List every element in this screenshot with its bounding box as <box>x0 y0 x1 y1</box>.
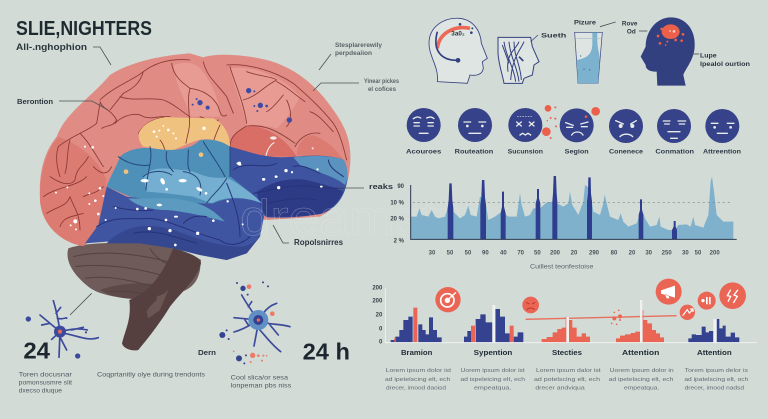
yellow dots <box>199 152 203 157</box>
y-axis labels: 0 <box>379 326 383 332</box>
y-axis labels: 2 % <box>394 238 405 244</box>
chart: stecties <box>542 317 590 342</box>
x-axis labels: 20 <box>571 250 578 256</box>
callout: berontion <box>17 99 108 110</box>
icon: neuron left <box>26 301 98 359</box>
column: sypention: Sypention <box>474 348 513 357</box>
y-axis labels: 10 % <box>390 200 405 206</box>
x-axis labels: 30 <box>429 250 436 256</box>
column: attention two: Attention <box>697 348 732 357</box>
y-axis labels <box>390 184 405 244</box>
y-axis labels: 200 <box>372 299 383 305</box>
right lobe dark blue <box>230 147 348 218</box>
x-axis labels: 30 <box>645 250 653 256</box>
icon: sad face badge <box>522 297 539 313</box>
column: stecties: ad potelscing elt, ech <box>534 377 600 383</box>
x-axis labels: 70 <box>517 250 525 256</box>
text block: right: lonpeman pbs niss <box>231 382 291 389</box>
y-axis labels: 20 <box>376 312 383 318</box>
y-axis labels: 200 <box>372 286 383 292</box>
chart: attention two <box>688 319 739 342</box>
column: attention two: drecer, imood nadsd <box>685 386 744 392</box>
icon: beaker <box>575 32 602 83</box>
x-axis labels: 80 <box>611 250 618 256</box>
column: attention one: ad ipetelscing elt, ech <box>609 377 673 383</box>
column: bramion: drecer, imood daoisd <box>386 386 446 392</box>
text block: left: dxecso diuque <box>19 388 63 395</box>
icon label: rove od: Rove <box>622 21 638 28</box>
right lobe small dots <box>238 162 323 188</box>
column: bramion <box>385 348 452 392</box>
face: conmation <box>655 109 694 155</box>
baseline and axis <box>385 288 757 343</box>
face: sucunsion <box>508 108 543 155</box>
column: attention two <box>684 348 748 392</box>
face: sucunsion: Sucunsion <box>508 148 543 155</box>
temporal lobe bands <box>55 140 322 260</box>
x-axis labels: 250 <box>662 250 672 256</box>
icon: arrow badge <box>680 305 695 320</box>
column: sypention: ad ispeleicing elt, ech <box>460 377 525 383</box>
icon row: heads and faces <box>406 17 750 155</box>
face: routeation: Routeation <box>455 148 493 155</box>
callout: perpdeaiion: Stesplarerewily <box>335 42 383 49</box>
face: conenece: Conenece <box>609 148 643 155</box>
column: stecties: Stecties <box>552 348 582 357</box>
x-axis labels: 30 <box>682 250 689 256</box>
chart: sypention <box>464 305 523 342</box>
icon label: sueth: Sueth <box>541 33 566 40</box>
x-axis labels: 40 <box>500 250 507 256</box>
text block: left: pomonsusmre slit <box>19 380 72 387</box>
stat: 24: 24 <box>23 338 50 364</box>
stat: 24 h: 24 h <box>303 338 350 364</box>
bar charts: five categories <box>372 279 757 392</box>
column: bramion: ad ipetelscing elt, ech <box>385 377 450 383</box>
column: attention two: ad ipatelscing elt, och <box>684 377 748 383</box>
face: conmation: Conmation <box>655 148 694 155</box>
icon: head with fibres <box>498 35 539 83</box>
watermark: dreamstime <box>240 190 525 246</box>
icon label: rove od <box>622 21 647 35</box>
column: stecties <box>534 348 601 392</box>
icon label: lupe: Lupe <box>700 52 717 59</box>
icon: head with arc <box>429 18 487 83</box>
column: stecties: drecer andviqua <box>535 386 586 392</box>
face: conenece <box>609 109 643 155</box>
threshold line <box>413 201 732 203</box>
left lobe white dots <box>84 146 86 148</box>
callout: yinear pickes <box>313 78 399 93</box>
face: acoruroes: Acouroes <box>406 148 442 155</box>
column: bramion: Lorem ipsum dolor ist <box>386 368 452 374</box>
neurons and bottom-left stats <box>19 281 350 395</box>
y-axis labels: 0 <box>379 339 383 345</box>
callout: ropolsnirres <box>273 225 344 247</box>
subtitle: All-.nghophion <box>16 42 87 53</box>
icon: megaphone <box>656 279 682 305</box>
callout: perpdeaiion: perpdeaiion <box>335 50 372 57</box>
x-axis labels <box>429 250 720 256</box>
flecks in pink <box>265 143 274 160</box>
callout: reaks <box>338 184 393 191</box>
dark spikes <box>448 176 677 239</box>
chart: attention one <box>616 300 664 342</box>
callout: berontion: Berontion <box>17 99 53 106</box>
icon: solid head <box>641 17 699 86</box>
dark base <box>85 183 264 260</box>
gyri lines: left lobe <box>43 103 112 230</box>
callout: reaks: reaks <box>369 184 393 191</box>
trend line <box>526 316 677 319</box>
callout: perpdeaiion <box>319 42 383 70</box>
x-axis labels: 90 <box>482 250 489 256</box>
face: segion <box>542 105 600 155</box>
column: attention one: Uorem ipsum dolor in <box>610 368 674 374</box>
column: attention one <box>609 348 674 392</box>
blue dots on cortex <box>192 88 292 123</box>
face: acoruroes <box>406 108 442 155</box>
chart: bramion <box>391 308 442 342</box>
column: sypention: empeatqua. <box>474 386 512 392</box>
x-axis labels: 200 <box>710 250 720 256</box>
icon: target <box>435 287 461 312</box>
column: sypention <box>460 348 525 392</box>
text block: right: Cool slica/or sesa <box>231 374 289 381</box>
text block: right <box>231 374 291 389</box>
text block: left: Toren docusnar <box>19 372 72 379</box>
white dots <box>141 179 149 182</box>
icon: pause badge <box>698 292 716 310</box>
x-axis labels: 50 <box>534 250 541 256</box>
brainstem <box>122 248 201 350</box>
callout: ropolsnirres: Ropolsnirres <box>294 238 344 247</box>
y-axis labels <box>372 286 383 345</box>
label: dern: Dern <box>198 350 216 357</box>
x-axis labels: 200 <box>550 250 561 256</box>
blue area series <box>411 177 733 239</box>
face: segion: Segion <box>565 148 589 155</box>
x-axis labels: 50 <box>447 250 454 256</box>
area chart: spikes over time <box>390 176 737 270</box>
leader line <box>70 293 92 315</box>
face: routeation <box>455 108 493 155</box>
icon: head with arc: 3a0₂ <box>451 31 465 38</box>
x-axis title: Cuillest teonfestoise <box>530 264 594 270</box>
icon label: pizure <box>574 19 616 27</box>
axes <box>411 185 737 239</box>
column: sypention: Uorem ipsum dolor ist <box>461 368 525 374</box>
y-axis labels: 20 % <box>390 217 405 223</box>
icon: burst on line <box>611 309 622 325</box>
cerebrum pink base <box>40 53 350 246</box>
gyri lines: upper lobes <box>100 60 347 160</box>
icon: bolts <box>719 282 746 309</box>
callout: yinear pickes: Yinear pickes <box>364 78 399 85</box>
x-axis labels: 290 <box>589 250 600 256</box>
brain illustration <box>40 53 350 350</box>
cerebellum <box>67 243 201 299</box>
title: SLIE,NIGHTERS <box>16 18 152 40</box>
icon label: pizure: Pizure <box>574 19 596 26</box>
icon: neuron right <box>219 281 290 364</box>
icon label: lupe <box>700 52 750 68</box>
yellow region <box>139 117 230 163</box>
icon label: rove od: Od <box>627 28 636 35</box>
column: attention two: Torem ipsum delor is <box>685 368 748 374</box>
x-axis labels: 20 <box>629 250 636 256</box>
column: stecties: Lorem ipsum dalor ist <box>536 368 601 374</box>
callout: subtitle leader <box>93 47 111 65</box>
face: attreention: Attreention <box>703 148 741 155</box>
text block: centre: Coqprtanitly olye during trendonts <box>97 372 205 379</box>
column: attention one: empeatqua. <box>624 386 660 392</box>
column: bramion: Bramion <box>401 348 433 357</box>
callout: yinear pickes: el cofices <box>368 86 397 93</box>
face: attreention <box>703 109 741 155</box>
x-axis labels: 50 <box>465 250 472 256</box>
icon label: lupe: lpealol ourtion <box>700 61 750 68</box>
x-axis labels: 50 <box>695 250 702 256</box>
text block: left <box>19 372 72 395</box>
y-axis labels: 90 <box>397 184 405 190</box>
column: attention one: Attention <box>622 348 660 357</box>
